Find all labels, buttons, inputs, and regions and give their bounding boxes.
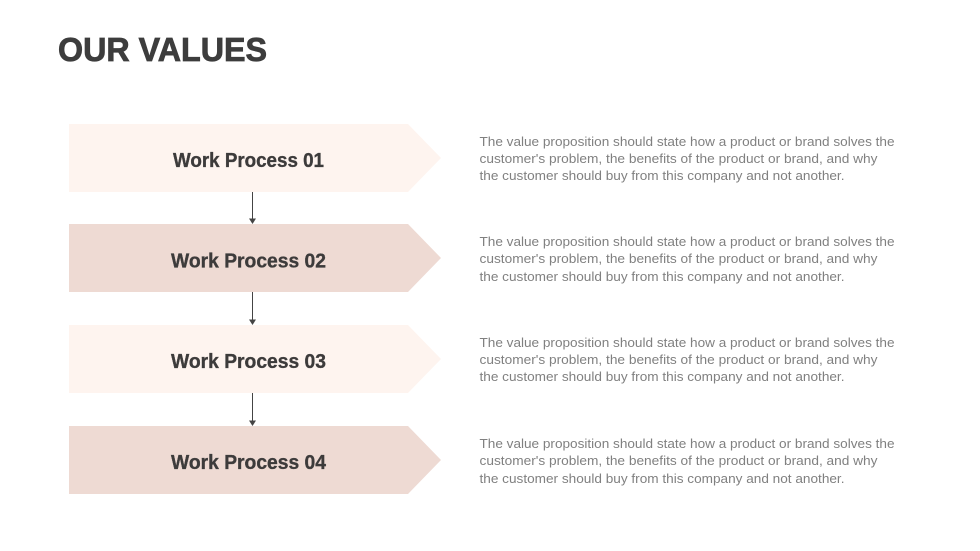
- description 03: [480, 335, 894, 384]
- arrow banner 01: [69, 124, 441, 192]
- description 04: [480, 436, 894, 486]
- description 01: customer's problem, the benefits of the product or brand, and why: [480, 151, 878, 166]
- step 3: work process 03: [69, 325, 441, 393]
- step 2: work process 02: [69, 224, 441, 292]
- step 4: work process 04: [69, 426, 441, 494]
- step 1: work process 01: [69, 124, 441, 192]
- connector arrow 3 to 4: [249, 393, 256, 426]
- arrow banner 04: [69, 426, 441, 494]
- arrow banner 02: [69, 224, 441, 292]
- description 03: customer's problem, the benefits of the product or brand, and why: [480, 352, 878, 367]
- description 04: the customer should buy from this company and not another.: [480, 471, 844, 486]
- description 03: the customer should buy from this company and not another.: [480, 369, 844, 384]
- description 02: [480, 234, 894, 284]
- label 03: Work Process 03: [171, 351, 326, 373]
- description 01: The value proposition should state how a product or brand solves the: [480, 134, 894, 149]
- label 04: Work Process 04: [171, 452, 327, 474]
- description 04: The value proposition should state how a product or brand solves the: [480, 436, 894, 451]
- description 01: the customer should buy from this company and not another.: [480, 168, 844, 183]
- label 01: Work Process 01: [173, 150, 324, 172]
- arrow banner 03: [69, 325, 441, 393]
- connector arrow 1 to 2: [249, 192, 256, 224]
- description 02: the customer should buy from this company and not another.: [480, 269, 844, 284]
- label 02: Work Process 02: [171, 250, 326, 272]
- connector arrow 2 to 3: [249, 292, 256, 325]
- description 01: [480, 134, 894, 183]
- description 03: The value proposition should state how a product or brand solves the: [480, 335, 894, 350]
- title: OUR VALUES: [58, 32, 267, 69]
- description 02: customer's problem, the benefits of the product or brand, and why: [480, 251, 878, 266]
- description 04: customer's problem, the benefits of the product or brand, and why: [480, 453, 878, 468]
- description 02: The value proposition should state how a product or brand solves the: [480, 234, 894, 249]
